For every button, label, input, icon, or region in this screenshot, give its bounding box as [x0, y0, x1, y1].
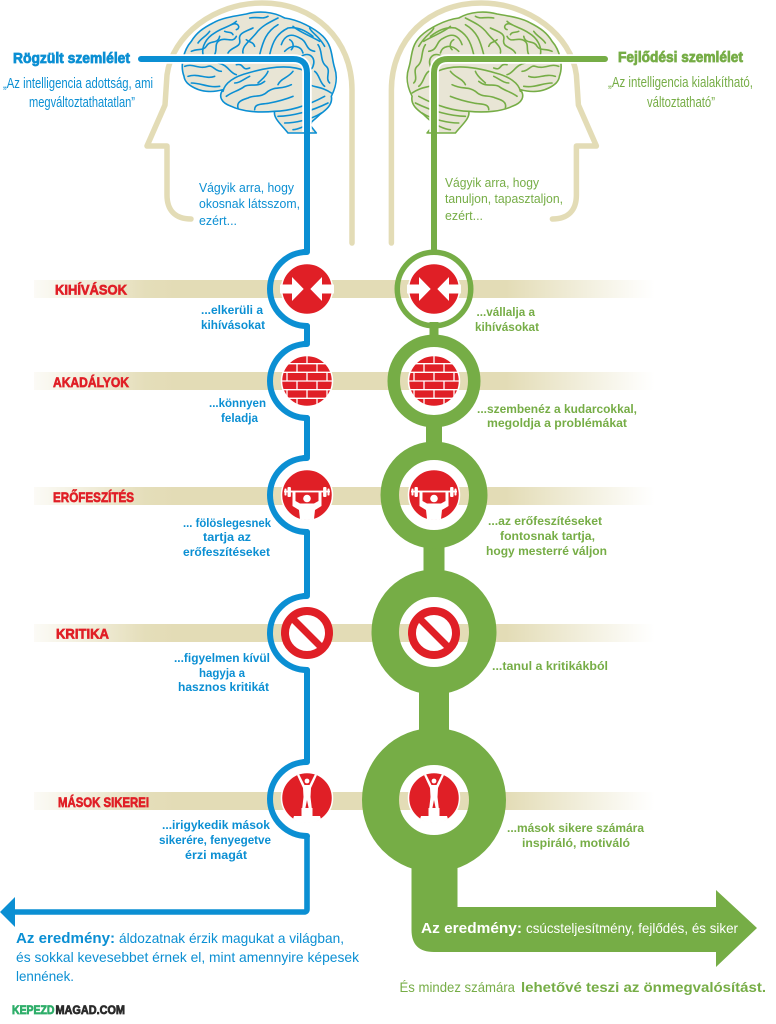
text: growth criticism: ...tanul a kritikákból [492, 659, 608, 673]
text: fixed challenges: ...elkerüli a [201, 303, 263, 317]
left brain [182, 12, 336, 133]
text: growth desire [445, 175, 563, 223]
text: fixed success of others: ...irigykedik mások [162, 818, 270, 832]
text: fixed result: lennének. [16, 968, 74, 984]
text: growth obstacles [477, 402, 637, 430]
text: fixed result: áldozatnak érzik magukat a világban, [119, 930, 344, 946]
text: fixed criticism: hasznos kritikát [178, 680, 269, 694]
text: growth effort: hogy mesterré váljon [486, 544, 607, 558]
text: fixed effort: erőfeszítéseket [183, 545, 270, 559]
logo: kepezdmagad.com: MAGAD.COM [56, 1003, 125, 1017]
icon: winner right [408, 772, 460, 825]
text: growth obstacles: ...szembenéz a kudarcokkal, [477, 402, 637, 416]
blue arrowhead [0, 897, 15, 927]
icon: arrows left [280, 264, 334, 314]
blue path: fixed mindset line with arcs and arrow [14, 59, 307, 912]
text: fixed desire: Vágyik arra, hogy [199, 180, 294, 195]
text: self-actualisation [400, 979, 766, 995]
text: fixed obstacles: ...könnyen [209, 396, 266, 410]
quote: fixed mindset: „Az intelligencia adottság, ami [3, 75, 153, 92]
band: Mások sikerei [34, 792, 655, 810]
text: growth desire: tanuljon, tapasztaljon, [445, 191, 563, 206]
text: fixed criticism: ...figyelmen kívül [174, 651, 270, 665]
text: growth effort: fontosnak tartja, [500, 529, 595, 543]
text: growth success of others: ...mások sikere számára [507, 821, 644, 835]
text: fixed desire: ezért... [199, 213, 237, 228]
icon: bricks right [408, 355, 460, 407]
band: Erőfeszítés [34, 487, 655, 505]
icon: bricks left [281, 355, 333, 407]
green path: growth mindset line with widening connectors [380, 59, 605, 854]
icon: arrows right [407, 264, 461, 314]
icon: weightlifter left [282, 470, 332, 521]
text: fixed result: és sokkal kevesebbet érnek el, mint amennyire képesek [16, 949, 360, 965]
text: growth obstacles: megoldja a problémákat [487, 416, 627, 430]
white halo: green line [434, 59, 607, 132]
green result arrow [412, 860, 757, 967]
text: fixed effort [183, 516, 271, 559]
band: Kritika [34, 624, 655, 642]
text: growth desire: Vágyik arra, hogy [445, 175, 539, 190]
icon: no sign left [285, 611, 329, 655]
icon: no sign right [412, 611, 456, 655]
text: fixed challenges [201, 303, 265, 332]
text: fixed success of others: sikerére, fenyegetve [159, 833, 271, 847]
text: fixed result: Az eredmény: [16, 930, 115, 947]
right brain [407, 12, 561, 133]
label: Kihívások: KIHÍVÁSOK [55, 282, 127, 298]
text: growth desire: ezért... [445, 208, 483, 223]
white halo: blue line [139, 59, 307, 132]
logo: kepezdmagad.com: KEPEZD [12, 1003, 55, 1017]
text: growth result: Az eredmény: [421, 920, 522, 937]
quote: fixed mindset [3, 75, 153, 111]
label: Akadályok: AKADÁLYOK [53, 374, 129, 390]
logo: kepezdmagad.com [12, 1003, 125, 1017]
text: fixed effort: tartja az [203, 530, 251, 544]
text: fixed success of others [159, 818, 271, 862]
text: growth challenges: kihívásokat [475, 320, 539, 334]
text: fixed criticism [174, 651, 270, 694]
text: growth effort [486, 514, 607, 558]
text: fixed obstacles: feladja [221, 411, 258, 425]
band: Kihívások [34, 280, 655, 298]
text: fixed success of others: érzi magát [185, 848, 247, 862]
text: growth challenges [475, 305, 539, 334]
text: fixed criticism: hagyja a [199, 666, 245, 680]
icon: winner left [282, 772, 332, 825]
quote: growth mindset [608, 74, 753, 111]
text: fixed effort: ... fölöslegesnek [183, 516, 271, 530]
text: growth result: csúcsteljesítmény, fejlődés, és siker [526, 920, 738, 936]
label: Erőfeszítés: ERŐFESZÍTÉS [53, 488, 134, 505]
text: self-actualisation: lehetővé teszi az önmegvalósítást. [521, 979, 766, 995]
heading: Fejlődési szemlélet: Fejlődési szemlélet [618, 50, 743, 66]
right head outline [391, 3, 596, 243]
quote: fixed mindset: megváltoztathatatlan” [29, 94, 135, 111]
left head outline [147, 3, 352, 243]
text: growth challenges: ...vállalja a [476, 305, 535, 319]
text: growth effort: ...az erőfeszítéseket [488, 514, 602, 528]
quote: growth mindset: változtatható” [647, 94, 715, 111]
text: fixed desire: okosnak látsszom, [199, 196, 300, 211]
label: Mások sikerei: MÁSOK SIKEREI [58, 794, 149, 810]
text: self-actualisation: És mindez számára [400, 979, 515, 995]
text: fixed obstacles [209, 396, 266, 425]
band: Akadályok [34, 372, 655, 390]
text: fixed result [16, 930, 360, 984]
icon: weightlifter right [408, 470, 460, 521]
text: fixed challenges: kihívásokat [201, 318, 265, 332]
text: growth success of others: inspiráló, motiváló [522, 836, 630, 850]
text: growth success of others [507, 821, 644, 850]
text: growth result [421, 920, 738, 937]
label: Kritika: KRITIKA [56, 626, 109, 642]
heading: Rögzült szemlélet: Rögzült szemlélet [13, 51, 130, 67]
text: fixed desire [199, 180, 300, 228]
